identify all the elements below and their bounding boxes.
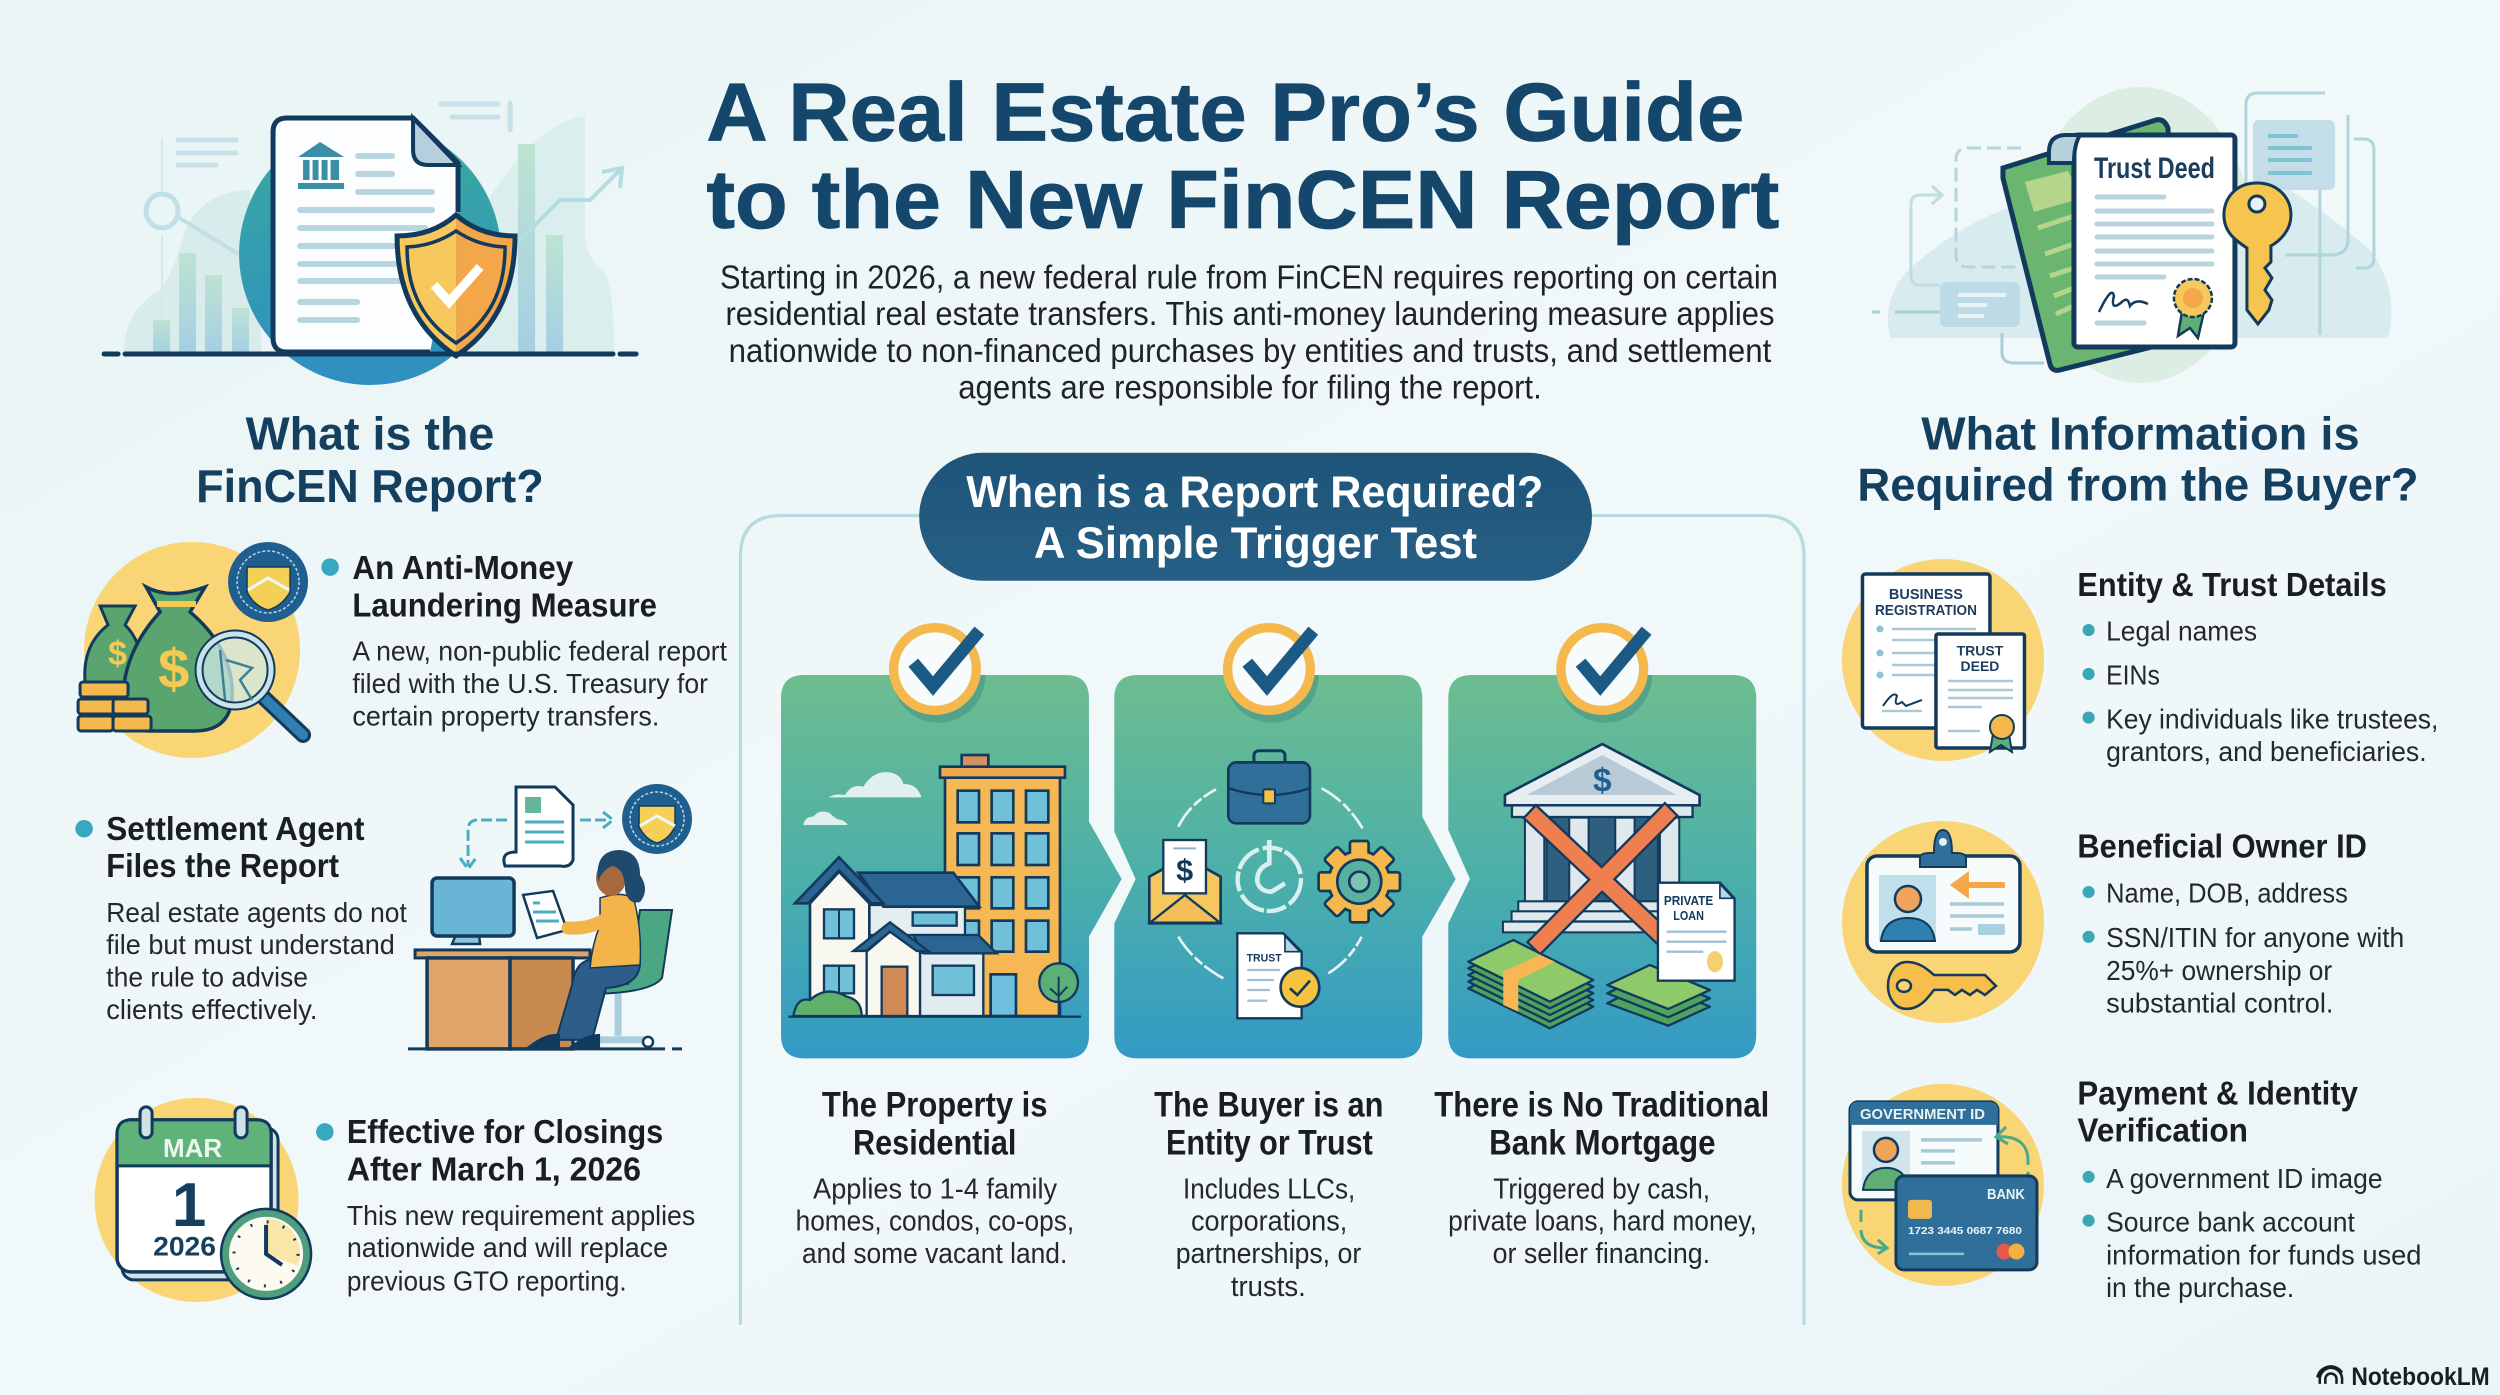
intro paragraph: residential real estate transfers. This anti-money laundering measure applies (725, 296, 1775, 333)
card 3: no bank mortgage: $ (1593, 763, 1612, 800)
text: no mortgage: or seller financing. (1493, 1238, 1710, 1270)
text: settlement agent: Settlement Agent (106, 811, 365, 848)
text: entity or trust (1154, 1086, 1383, 1303)
text: anti-money laundering measure: filed with the U.S. Treasury for (352, 668, 708, 699)
card 2: entity or trust: TRUST (1247, 952, 1282, 964)
icon: government ID and bank card (1842, 1084, 2044, 1286)
text: entity or trust: Includes LLCs, (1183, 1173, 1355, 1205)
icon: calendar march 1 2026 with clock: MAR (163, 1133, 222, 1163)
icon: business registration and trust deed: BUSINESS (1889, 587, 1963, 603)
text: entity or trust: Entity or Trust (1166, 1123, 1373, 1162)
panel: trigger test (740, 453, 1804, 1325)
heading pill: When is a Report Required? (966, 468, 1543, 517)
card 3: no bank mortgage (1448, 675, 1756, 1058)
text: payment and identity verification: A government ID image (2106, 1163, 2383, 1194)
text: beneficial owner id: SSN/ITIN for anyone with (2106, 922, 2404, 953)
card 3: no bank mortgage: LOAN (1673, 909, 1704, 923)
text: no mortgage: Triggered by cash, (1493, 1173, 1710, 1205)
illustration: report document with shield (104, 103, 636, 385)
text: settlement agent: Real estate agents do not (106, 897, 407, 928)
heading pill (919, 453, 1592, 581)
text: residential (796, 1086, 1074, 1270)
icon: calendar march 1 2026 with clock: 2026 (153, 1231, 216, 1261)
text: entity or trust: partnerships, or (1176, 1238, 1362, 1270)
text: payment and identity verification (2077, 1076, 2421, 1303)
card 3: no bank mortgage: PRIVATE (1664, 894, 1713, 908)
text: no mortgage: Bank Mortgage (1489, 1123, 1716, 1162)
icon: government ID and bank card: BANK (1987, 1186, 2025, 1203)
intro paragraph: Starting in 2026, a new federal rule from FinCEN requires reporting on certain (720, 260, 1778, 297)
text: anti-money laundering measure: A new, non-public federal report (352, 635, 727, 666)
check badges (892, 628, 1652, 723)
intro paragraph: agents are responsible for filing the report. (958, 370, 1542, 407)
text: anti-money laundering measure: An Anti-Money (352, 550, 574, 587)
text: beneficial owner id: Beneficial Owner ID (2077, 829, 2367, 866)
text: entity and trust details: grantors, and beneficiaries. (2106, 736, 2427, 767)
text: entity or trust: corporations, (1191, 1205, 1347, 1237)
icon: money bags and magnifier (78, 542, 308, 758)
title: A Real Estate Pro’s Guide (706, 65, 1744, 158)
text: effective date (316, 1114, 695, 1297)
text: payment and identity verification: information for funds used (2106, 1239, 2421, 1270)
illustration: trust deed and key: Trust Deed (2094, 152, 2215, 185)
icon: calendar march 1 2026 with clock (95, 1098, 311, 1302)
text: settlement agent: file but must understand (106, 929, 395, 960)
card 2: entity or trust (1114, 675, 1456, 1058)
heading: buyer information (1857, 408, 2419, 511)
text: no mortgage: There is No Traditional (1434, 1086, 1769, 1125)
text: effective date: nationwide and will replace (347, 1232, 668, 1263)
text: anti-money laundering measure: Laundering Measure (352, 587, 657, 624)
card 2: entity or trust: $ (1176, 854, 1193, 888)
text: effective date: Effective for Closings (347, 1114, 663, 1151)
text: residential: The Property is (822, 1086, 1048, 1125)
text: residential: and some vacant land. (802, 1238, 1067, 1270)
text: effective date: After March 1, 2026 (347, 1152, 641, 1189)
icon: calendar march 1 2026 with clock: 1 (172, 1171, 206, 1240)
text: effective date: This new requirement applies (347, 1200, 695, 1231)
cards with icons (781, 628, 1756, 1058)
intro paragraph (720, 260, 1778, 407)
text: payment and identity verification: in the purchase. (2106, 1272, 2294, 1303)
heading: buyer information: What Information is (1921, 408, 2360, 460)
heading: what is the report: FinCEN Report? (196, 460, 544, 512)
text: entity or trust: The Buyer is an (1154, 1086, 1383, 1125)
icon: money bags and magnifier: $ (158, 637, 189, 700)
text: no mortgage (1434, 1086, 1769, 1270)
heading: what is the report: What is the (246, 408, 494, 460)
heading: buyer information: Required from the Buyer? (1857, 459, 2419, 511)
text: beneficial owner id: 25%+ ownership or (2106, 955, 2332, 986)
icon: business registration and trust deed: REGISTRATION (1875, 603, 1977, 619)
icon: business registration and trust deed: TRUST (1957, 643, 2004, 659)
text: anti-money laundering measure: certain property transfers. (352, 701, 659, 732)
text: entity or trust: trusts. (1231, 1271, 1306, 1303)
icon: business registration and trust deed (1842, 559, 2044, 761)
text: effective date: previous GTO reporting. (347, 1266, 627, 1297)
icon: government ID and bank card: GOVERNMENT ID (1860, 1106, 1985, 1123)
text: anti-money laundering measure (321, 550, 727, 732)
card 1: residential property (781, 675, 1122, 1058)
text: payment and identity verification: Verification (2077, 1113, 2248, 1150)
heading pill: A Simple Trigger Test (1034, 519, 1477, 568)
text: payment and identity verification: Payment & Identity (2077, 1076, 2358, 1113)
icon: money bags and magnifier: $ (108, 635, 127, 673)
text: residential: homes, condos, co-ops, (796, 1205, 1074, 1237)
text: entity and trust details (2077, 567, 2438, 767)
illustration: trust deed and key (1872, 87, 2391, 383)
text: entity and trust details: Key individuals like trustees, (2106, 703, 2438, 734)
text: payment and identity verification: Source bank account (2106, 1206, 2355, 1237)
text: settlement agent: the rule to advise (106, 961, 308, 992)
text: beneficial owner id: substantial control. (2106, 988, 2333, 1019)
icon: business registration and trust deed: DEED (1961, 658, 1999, 674)
text: settlement agent: Files the Report (106, 848, 339, 885)
text: beneficial owner id: Name, DOB, address (2106, 878, 2348, 909)
title: to the New FinCEN Report (706, 153, 1779, 246)
text: no mortgage: private loans, hard money, (1448, 1205, 1757, 1237)
text: residential: Applies to 1-4 family (813, 1173, 1058, 1205)
text: settlement agent: clients effectively. (106, 994, 318, 1025)
icon: ID badge and key (1842, 821, 2044, 1023)
NotebookLM logo: NotebookLM (2351, 1364, 2490, 1391)
text: residential: Residential (853, 1123, 1016, 1162)
title (706, 65, 1779, 246)
icon: government ID and bank card: 1723 3445 0687 7680 (1908, 1226, 2022, 1237)
text: beneficial owner id (2077, 829, 2404, 1019)
text: entity and trust details: Legal names (2106, 616, 2257, 647)
text: entity and trust details: EINs (2106, 659, 2160, 690)
intro paragraph: nationwide to non-financed purchases by entities and trusts, and settlement (729, 333, 1772, 370)
icon: agent at desk filing report (408, 784, 692, 1049)
heading: what is the report (196, 408, 544, 512)
text: settlement agent (75, 811, 407, 1025)
text: entity and trust details: Entity & Trust Details (2077, 567, 2387, 604)
